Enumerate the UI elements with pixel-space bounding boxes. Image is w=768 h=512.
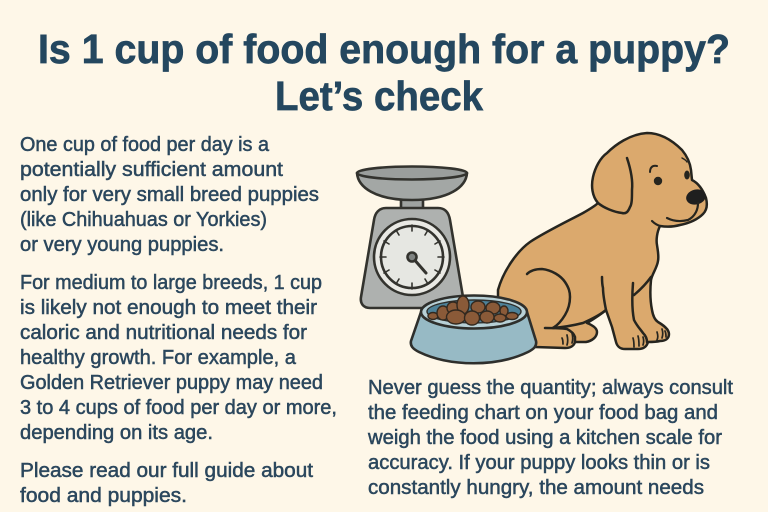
text block: medium to large breeds: Golden Retriever puppy may need (20, 372, 323, 394)
text block: never guess: weigh the food using a kitchen scale for (367, 427, 722, 449)
text block: never guess: Never guess the quantity; always consult (368, 377, 733, 399)
belly (553, 277, 606, 328)
text block: small breeds: only for very small breed puppies (20, 184, 319, 206)
dial ticks (380, 225, 444, 289)
text block: read full guide: Please read our full guide about (20, 460, 313, 482)
text block: read full guide: food and puppies. (20, 485, 187, 507)
icon: food bowl (411, 296, 536, 363)
scale neck (401, 198, 423, 210)
text block: small breeds: One cup of food per day is a (20, 134, 270, 156)
text block: never guess: accuracy. If your puppy looks thin or is (368, 452, 710, 474)
title: Let’s check (275, 73, 483, 119)
text block: small breeds: (like Chihuahuas or Yorkies) (20, 209, 267, 231)
text block: medium to large breeds: 3 to 4 cups of food per day or more, (20, 397, 337, 419)
title: Is 1 cup of food enough for a puppy? (38, 26, 730, 72)
text block: medium to large breeds (20, 272, 337, 444)
text block: medium to large breeds: depending on its age. (20, 422, 213, 444)
scale dial (374, 219, 450, 295)
text block: small breeds: or very young puppies. (20, 234, 224, 256)
front leg (632, 277, 651, 342)
text block: never guess (367, 377, 733, 499)
text block: small breeds (20, 134, 319, 256)
text block: read full guide (20, 460, 313, 507)
face (650, 166, 657, 172)
dial needle (412, 257, 426, 273)
text block: small breeds: potentially sufficient amount (20, 159, 283, 181)
kibble (428, 296, 518, 325)
bowl rim (421, 296, 527, 328)
bowl body (411, 312, 536, 363)
text block: medium to large breeds: is likely not enough to meet their (20, 297, 317, 319)
scale body (361, 208, 463, 308)
text block: never guess: constantly hungry, the amount needs (368, 477, 704, 499)
icon: puppy (498, 133, 708, 349)
text block: medium to large breeds: For medium to large breeds, 1 cup (20, 272, 322, 294)
scale pan (357, 173, 467, 200)
text block: medium to large breeds: caloric and nutritional needs for (20, 322, 307, 344)
rear leg (527, 269, 575, 342)
paw toes (562, 329, 666, 347)
ear (598, 158, 632, 213)
text block: never guess: the feeding chart on your food bag and (368, 402, 718, 424)
icon: kitchen scale (357, 166, 467, 308)
text block: medium to large breeds: healthy growth. For example, a (20, 347, 297, 369)
title (38, 26, 730, 119)
